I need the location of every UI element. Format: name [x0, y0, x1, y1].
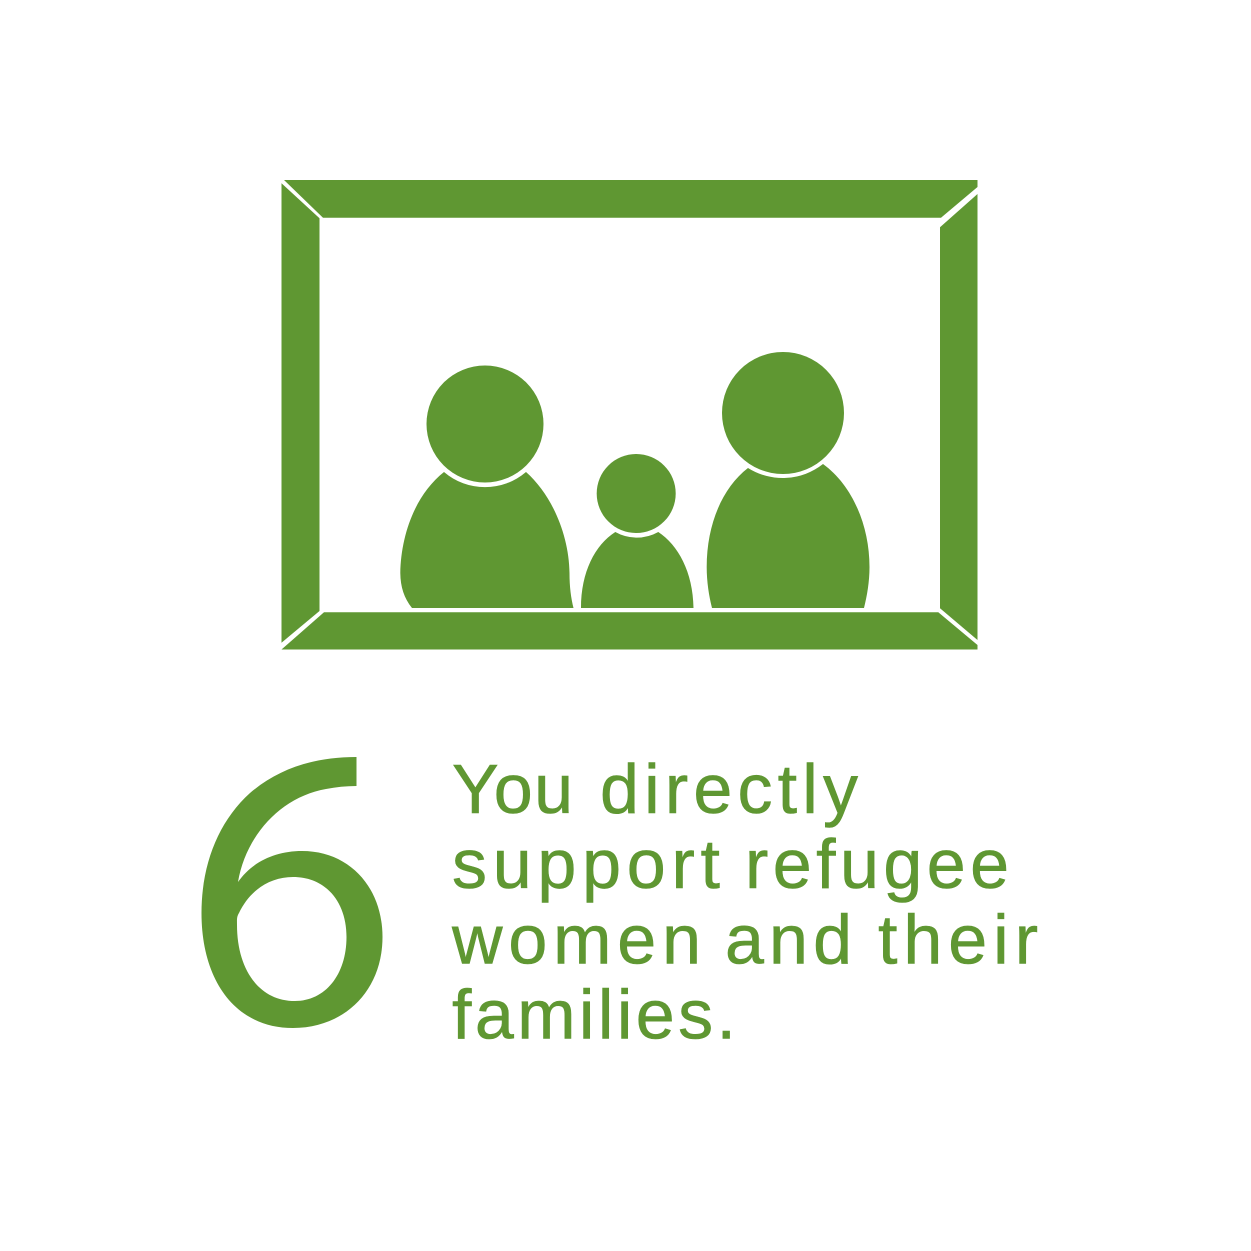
text block: caption: You	[452, 750, 573, 828]
person: right adult	[707, 352, 870, 608]
person: left adult	[400, 366, 574, 608]
text block: caption: refugee	[745, 825, 1009, 903]
text block: caption: their	[878, 900, 1038, 978]
frame left bar	[282, 183, 320, 643]
frame right bar	[940, 194, 978, 640]
frame bottom bar	[282, 612, 978, 650]
text block: caption: directly	[600, 750, 858, 828]
icon: family picture frame	[282, 180, 978, 650]
person: child	[581, 454, 694, 608]
frame top bar	[284, 180, 978, 218]
text block: caption: families.	[452, 976, 736, 1054]
text block: caption: support	[452, 825, 720, 903]
text block: caption: and	[725, 900, 852, 978]
text block: caption: women	[451, 900, 701, 978]
numeral 6	[202, 757, 382, 1028]
text block: caption	[451, 750, 1038, 1054]
